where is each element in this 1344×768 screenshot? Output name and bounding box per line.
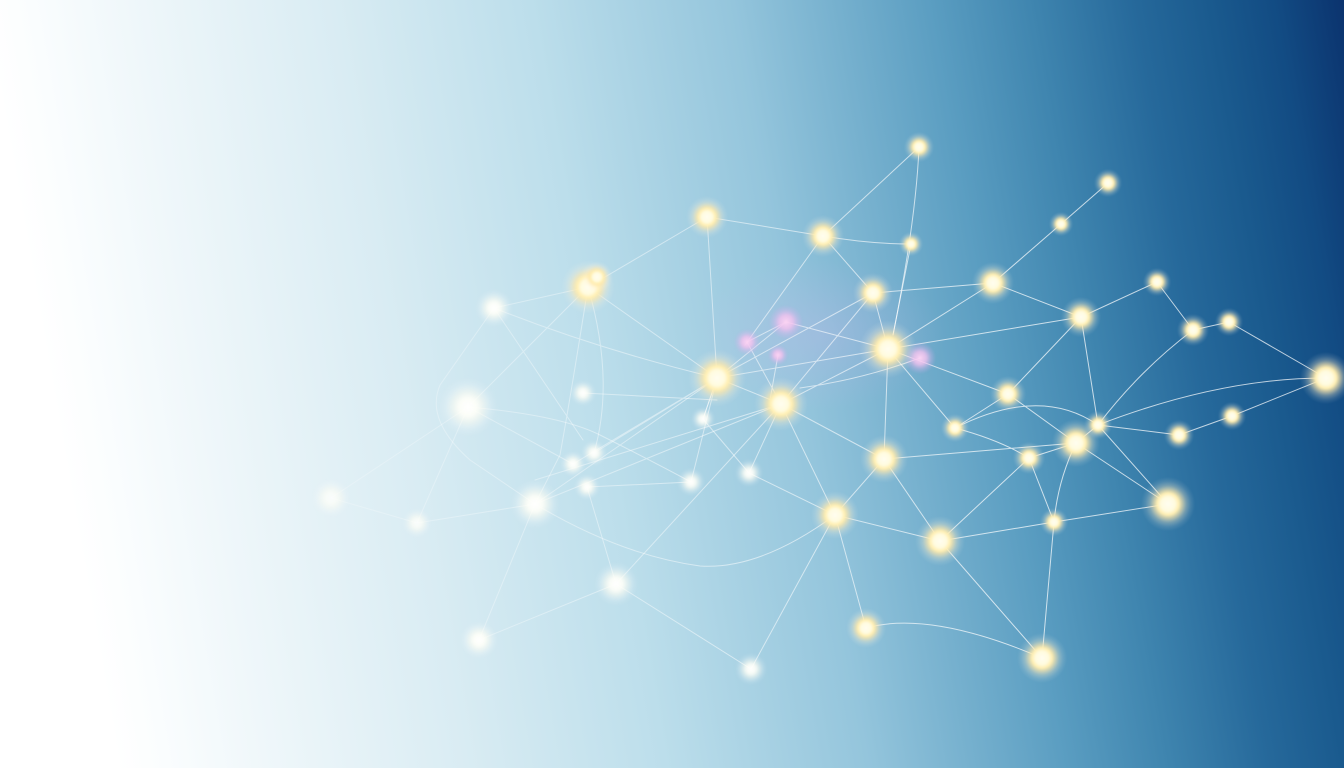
soft white nodes bbox=[311, 289, 767, 685]
glowing warm nodes bbox=[561, 132, 1344, 683]
connecting lines bbox=[331, 147, 1326, 669]
lavender central glow bbox=[695, 260, 945, 410]
pink accent nodes bbox=[734, 305, 936, 374]
